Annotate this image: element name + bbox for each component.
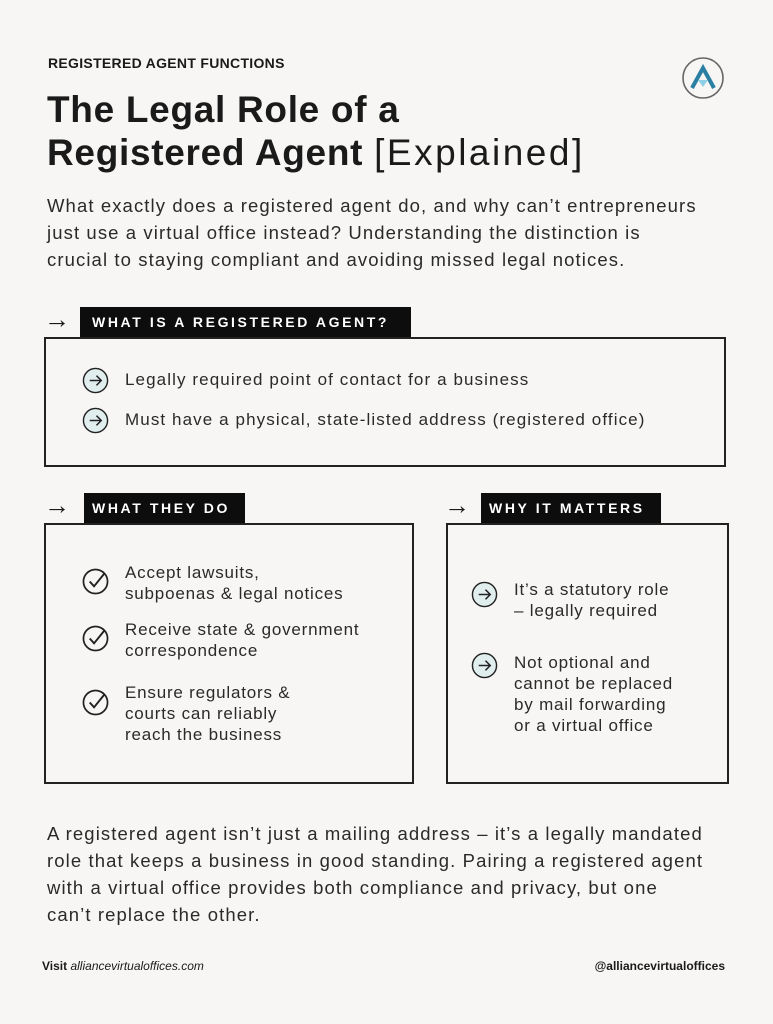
arrow: → <box>44 490 70 520</box>
box <box>44 523 414 784</box>
item 3: courts can reliably <box>125 704 277 723</box>
heading tab <box>80 307 411 337</box>
item 3 <box>82 683 290 744</box>
icon: logo <box>682 57 724 99</box>
panel: what they do <box>44 490 414 784</box>
item 2: or a virtual office <box>514 716 654 735</box>
item 2: by mail forwarding <box>514 695 666 714</box>
closing paragraph <box>47 823 703 925</box>
item 1: Accept lawsuits, <box>125 563 260 582</box>
box <box>446 523 729 784</box>
box <box>44 337 726 467</box>
item 1 <box>82 368 529 394</box>
intro text: crucial to staying compliant and avoiding missed legal notices. <box>47 249 625 270</box>
item 2: correspondence <box>125 641 258 660</box>
item 1: subpoenas & legal notices <box>125 584 343 603</box>
title <box>47 89 585 173</box>
heading tab: WHAT IS A REGISTERED AGENT? <box>92 314 389 330</box>
closing paragraph: with a virtual office provides both compliance and privacy, but one <box>47 877 658 898</box>
kicker: REGISTERED AGENT FUNCTIONS <box>48 55 285 71</box>
panel: why it matters <box>444 490 729 784</box>
heading tab <box>481 493 661 523</box>
heading tab <box>84 493 245 523</box>
closing paragraph: A registered agent isn’t just a mailing address – it’s a legally mandated <box>47 823 703 844</box>
title: The Legal Role of a <box>47 89 400 130</box>
intro text: just use a virtual office instead? Understanding the distinction is <box>47 222 641 243</box>
item 1 <box>82 563 343 603</box>
heading tab: WHAT THEY DO <box>92 500 230 516</box>
title: Registered Agent [Explained] <box>47 132 585 173</box>
item 2: cannot be replaced <box>514 674 673 693</box>
item 1 <box>472 580 669 620</box>
item 2 <box>472 652 673 735</box>
item 1: Legally required point of contact for a business <box>125 370 529 389</box>
item 2: Not optional and <box>514 653 651 672</box>
panel: what is a registered agent <box>44 304 726 467</box>
item 2 <box>82 620 359 660</box>
item 3: reach the business <box>125 725 282 744</box>
footer right: @alliancevirtualoffices <box>595 959 725 973</box>
intro text <box>46 195 697 270</box>
closing paragraph: role that keeps a business in good standing. Pairing a registered agent <box>47 850 703 871</box>
arrow: → <box>444 490 470 520</box>
item 2: Receive state & government <box>125 620 359 639</box>
item 2 <box>82 408 645 434</box>
item 1: – legally required <box>514 601 658 620</box>
item 3: Ensure regulators & <box>125 683 290 702</box>
heading tab: WHY IT MATTERS <box>489 500 645 516</box>
footer left: Visit alliancevirtualoffices.com <box>42 959 204 973</box>
intro text: What exactly does a registered agent do, and why can’t entrepreneurs <box>47 195 697 216</box>
arrow: → <box>44 304 70 334</box>
item 1: It’s a statutory role <box>514 580 669 599</box>
closing paragraph: can’t replace the other. <box>47 904 261 925</box>
item 2: Must have a physical, state-listed address (registered office) <box>125 410 645 429</box>
